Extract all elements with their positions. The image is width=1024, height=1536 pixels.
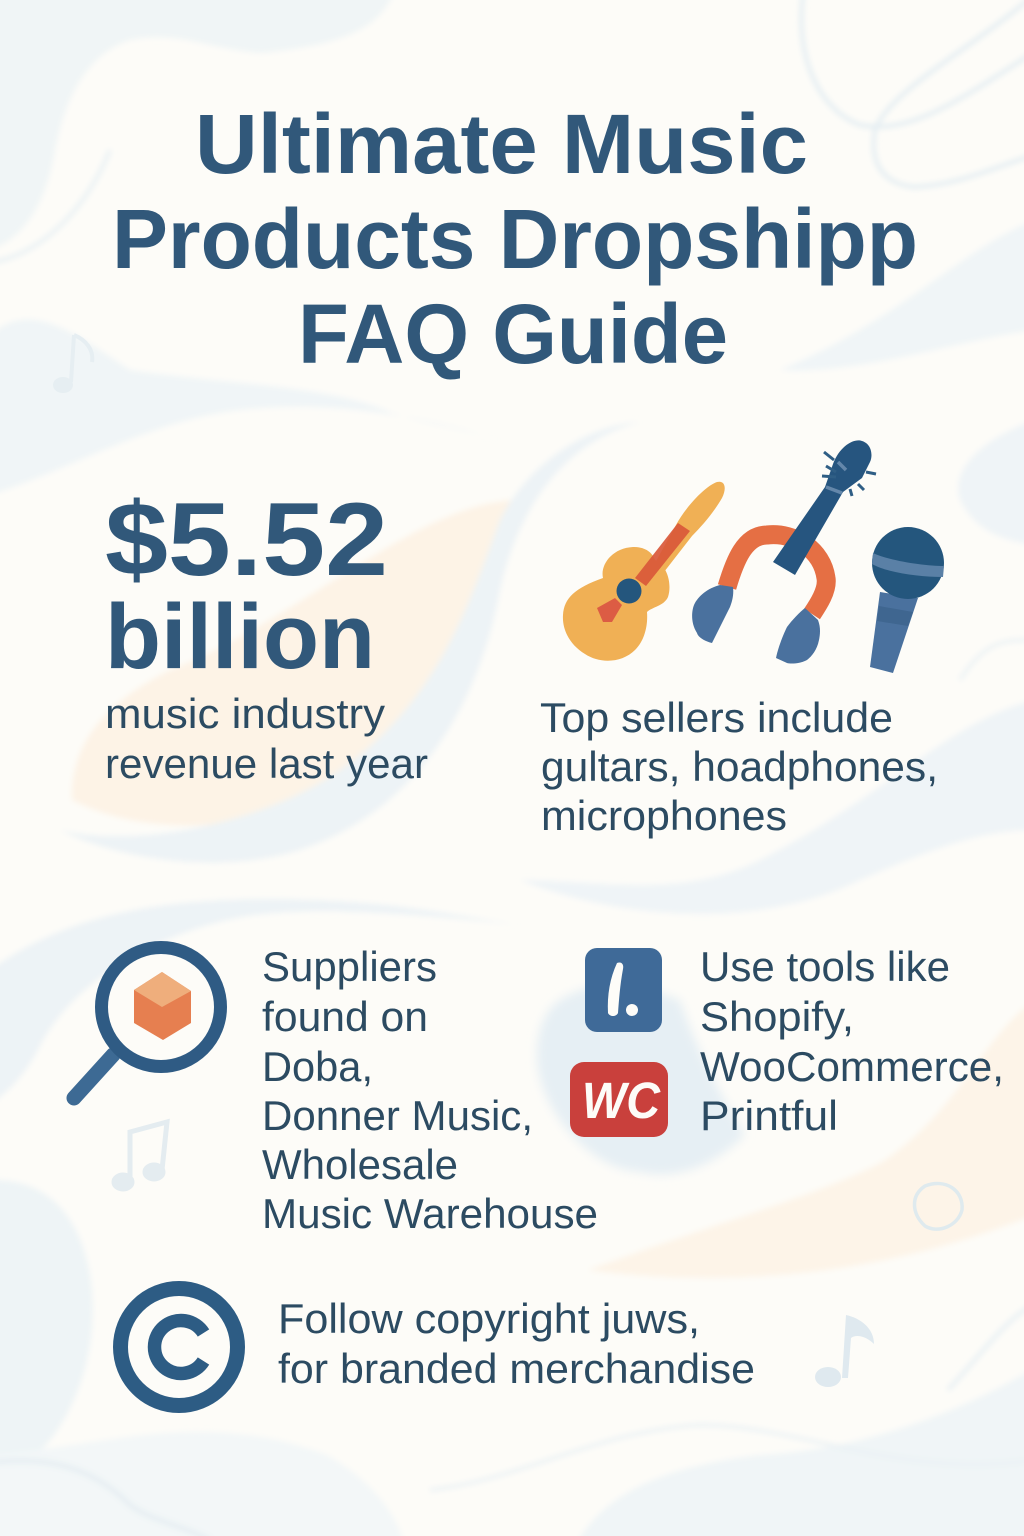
icon: magnifying glass with box — [74, 948, 220, 1098]
title: FAQ Guide — [298, 287, 728, 381]
icon: faint circle — [914, 1183, 962, 1229]
text: tools: WooCommerce, — [700, 1043, 1004, 1090]
statistic: revenue: billion — [105, 586, 375, 688]
icon: faint music note left — [55, 335, 92, 391]
statistic: revenue — [105, 482, 428, 787]
icon: headphones — [692, 535, 826, 664]
title: Products Dropshipp — [112, 192, 918, 286]
text: copyright: for branded merchandise — [278, 1345, 755, 1392]
text: copyright — [278, 1295, 755, 1392]
icon: guitar neck — [773, 440, 876, 575]
background blue blob behind tiles — [537, 985, 745, 1175]
text: tools: Shopify, — [700, 993, 854, 1040]
text: tools: Printful — [700, 1092, 838, 1139]
text: suppliers: Music Warehouse — [262, 1190, 598, 1237]
text: top sellers — [540, 694, 938, 839]
text: suppliers: Donner Music, — [262, 1092, 533, 1139]
title — [112, 97, 918, 381]
text: suppliers — [262, 943, 598, 1237]
text: suppliers: Doba, — [262, 1043, 373, 1090]
icon: faint beamed notes — [114, 1122, 167, 1189]
text: top sellers: microphones — [541, 792, 787, 839]
text: suppliers: found on — [262, 993, 428, 1040]
text: copyright: Follow copyright juws, — [278, 1295, 700, 1342]
icon: copyright — [120, 1288, 238, 1406]
icon: Shopify-style tile — [585, 948, 662, 1032]
statistic: revenue: music industry — [105, 690, 385, 737]
icon: WooCommerce tile: WC — [582, 1072, 661, 1129]
icon: faint music note right — [815, 1315, 874, 1387]
text: suppliers: Wholesale — [262, 1141, 458, 1188]
text: top sellers: Top sellers include — [540, 694, 893, 741]
icon: microphone — [870, 527, 944, 673]
statistic: revenue: $5.52 — [105, 482, 388, 598]
text: tools — [700, 943, 1004, 1139]
statistic: revenue: revenue last year — [105, 740, 428, 787]
icon: WooCommerce tile — [570, 1062, 668, 1137]
title: Ultimate Music — [195, 97, 808, 191]
icon: acoustic guitar — [563, 482, 725, 661]
text: top sellers: gultars, hoadphones, — [541, 743, 938, 790]
text: suppliers: Suppliers — [262, 943, 437, 990]
text: tools: Use tools like — [700, 943, 950, 990]
